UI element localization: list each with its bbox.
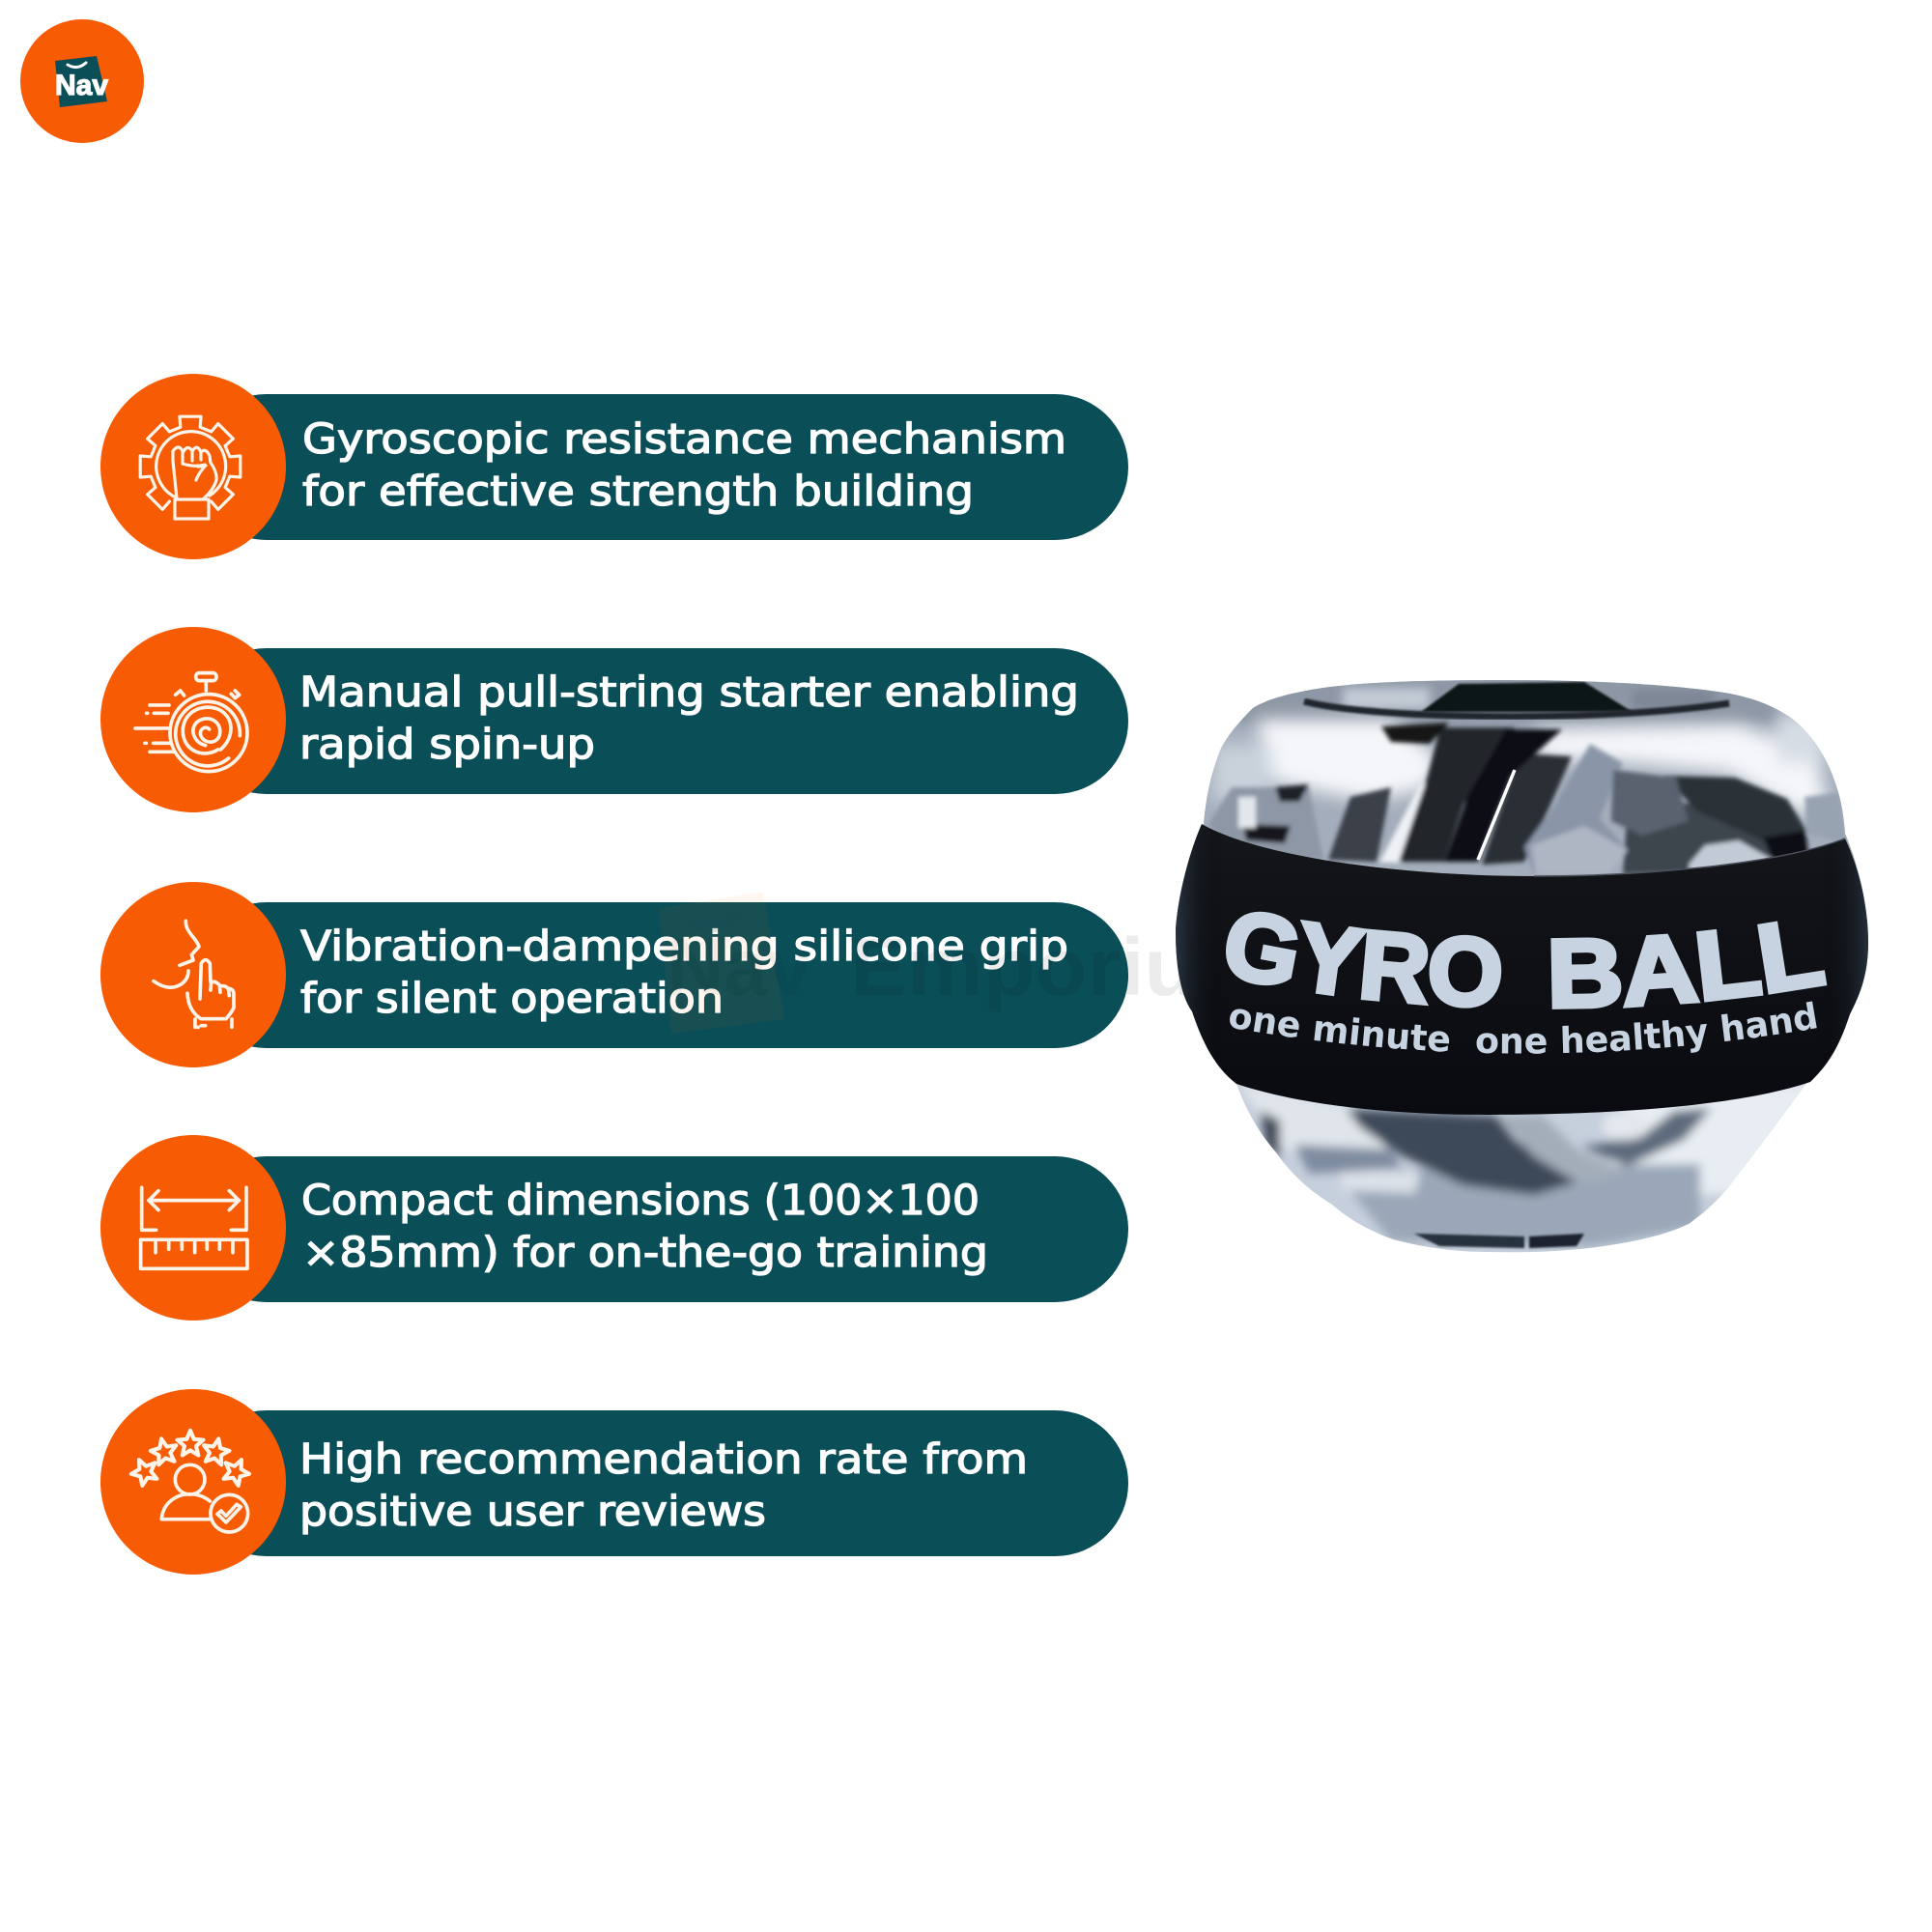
- feature text 5: positive user reviews: [299, 1489, 766, 1536]
- band lettering: tagline: one minute one healthy hand: [1230, 1001, 1817, 1054]
- watermark: Nav Emporium: Nav: [667, 922, 811, 1012]
- top rim and inner hole: [1236, 676, 1777, 724]
- icon circle 4: [100, 1135, 286, 1321]
- black silicone band: [1176, 824, 1868, 1115]
- feature text 1: Gyroscopic resistance mechanism: [302, 416, 1066, 464]
- highlights in upper glass: [1212, 715, 1831, 821]
- bar 2: [193, 648, 1128, 794]
- icon circle 3: [100, 882, 286, 1067]
- lip under rim: [1304, 701, 1729, 717]
- bar 4: [193, 1156, 1128, 1302]
- feature text 3: Vibration-dampening silicone grip: [300, 923, 1068, 971]
- feature text 2: Manual pull-string starter enabling: [299, 669, 1079, 717]
- feature text 1: [302, 416, 1066, 516]
- icon circle 5: [100, 1389, 286, 1575]
- white streak on rotor: [1478, 770, 1515, 860]
- icon: stopwatch with spiral: [135, 673, 247, 772]
- feature text 3: for silent operation: [300, 976, 724, 1023]
- band lettering: GYRO BALL: GYRO: [1226, 912, 1501, 1009]
- product image: gyro ball: [1176, 680, 1868, 1252]
- bar 1: [193, 394, 1128, 540]
- feature row 3: silicone grip: [100, 882, 1128, 1067]
- logo badge: Nav: [55, 70, 108, 101]
- feature row 1: gyroscopic resistance: [100, 374, 1128, 559]
- feature text 5: High recommendation rate from: [299, 1436, 1028, 1484]
- feature row 5: user reviews: [100, 1389, 1128, 1575]
- icon: gear with fist: [140, 416, 241, 519]
- icon: ruler and width arrow: [141, 1187, 247, 1268]
- feature text 3: [300, 923, 1068, 1023]
- feature text 4: [301, 1178, 988, 1277]
- icon: hushing face and finger: [154, 921, 234, 1027]
- band lettering: GYRO BALL: [1226, 912, 1828, 1009]
- feature text 4: ×85mm) for on-the-go training: [302, 1230, 988, 1277]
- internal rotor and mechanism: [1208, 723, 1847, 874]
- feature text 5: [299, 1436, 1028, 1536]
- feature text 2: [299, 669, 1079, 769]
- icon: five stars, user and check: [128, 1431, 253, 1532]
- feature row 2: pull-string starter: [100, 627, 1128, 812]
- feature text 1: for effective strength building: [302, 469, 974, 516]
- watermark: Nav Emporium: Emporium: [850, 922, 1272, 1012]
- glass body: [1204, 680, 1864, 1252]
- icon circle 1: [100, 374, 286, 559]
- lower glass internals: [1236, 1082, 1816, 1246]
- bottom slot: [1414, 1234, 1584, 1248]
- feature text 4: Compact dimensions (100×100: [301, 1178, 980, 1225]
- watermark: Nav Emporium: [659, 892, 1272, 1034]
- icon circle 2: [100, 627, 286, 812]
- bar 5: [193, 1410, 1128, 1556]
- feature text 2: rapid spin-up: [299, 722, 595, 769]
- feature row 4: compact dimensions: [100, 1135, 1128, 1321]
- band lettering: GYRO BALL: BALL: [1550, 922, 1828, 1009]
- logo badge: [20, 19, 144, 143]
- bar 3: [193, 902, 1128, 1048]
